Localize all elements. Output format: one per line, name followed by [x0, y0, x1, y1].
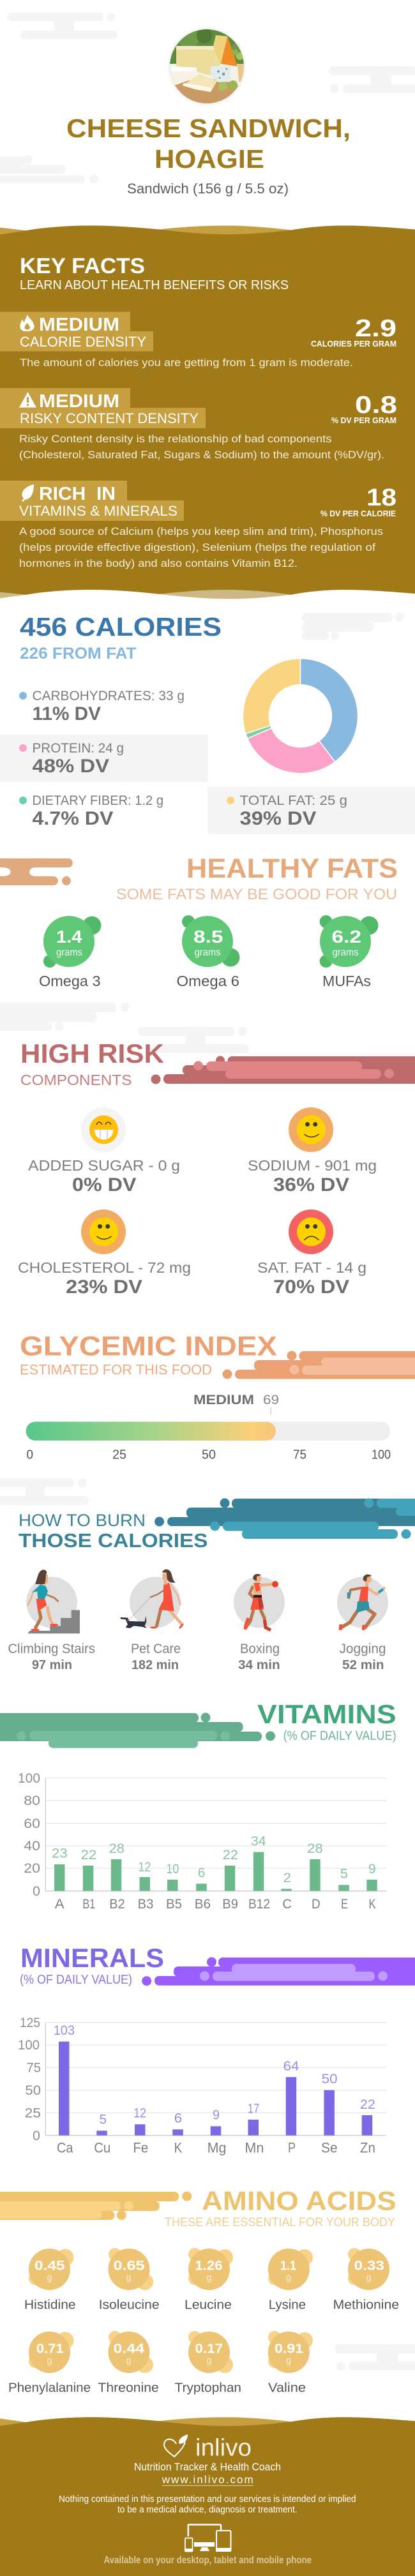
fact: rich in vitamins and minerals: A good source of Calcium (helps you keep slim and trim), Phosphorus: [19, 525, 383, 537]
risk: cholesterol: CHOLESTEROL - 72 mg: [18, 1259, 191, 1276]
figure: runner: [340, 1575, 385, 1630]
bar chart: minerals: Ca: [57, 2140, 73, 2156]
fat: omega 3: 1.4: [56, 927, 82, 947]
amino acid: phenylalanine: 0.71: [36, 2342, 64, 2356]
heading: healthy fats: HEALTHY FATS: [186, 853, 398, 884]
fact: calorie density: CALORIES PER GRAM: [311, 339, 396, 348]
amino acid: leucine: [185, 2248, 233, 2312]
fact: rich in vitamins and minerals: % DV PER CALORIE: [321, 509, 396, 518]
title: HOAGIE: [155, 144, 264, 174]
glycemic index gauge: 75: [293, 1448, 306, 1462]
heading: calories: [20, 612, 222, 663]
amino acid: lysine: g: [286, 2272, 291, 2283]
heading: vitamins: (% OF DAILY VALUE): [283, 1729, 396, 1743]
fat: omega 3: [39, 916, 101, 989]
bar chart: vitamins: B6: [195, 1897, 211, 1912]
disclaimer: Nothing contained in this presentation and our services is intended or implied: [59, 2494, 356, 2505]
bar chart: vitamins: D: [312, 1897, 321, 1912]
bar chart: minerals: 103: [54, 2023, 75, 2038]
bar chart: minerals: Mg: [207, 2140, 226, 2156]
banner: green cloud: [0, 1713, 275, 1748]
disclaimer: to be a medical advice, diagnosis or treatment.: [117, 2505, 298, 2515]
bar chart: vitamins: 100: [18, 1771, 40, 1786]
banner: orange cloud: [222, 1351, 415, 1379]
activity: jogging: Jogging: [340, 1642, 386, 1656]
amino acid: phenylalanine: g: [47, 2355, 52, 2366]
fact: calorie density: MEDIUM: [39, 315, 119, 335]
fact: calorie density: [0, 311, 396, 369]
bar chart: vitamins: A: [55, 1897, 64, 1912]
banner: yellow cloud: [0, 2192, 192, 2220]
glycemic index gauge: 25: [112, 1448, 126, 1462]
fact: risky content density: RISKY CONTENT DENSITY: [20, 410, 199, 426]
fact: risky content density: MEDIUM: [39, 391, 119, 412]
amino acid: tryptophan: Tryptophan: [175, 2381, 241, 2395]
risk: sodium: [248, 1107, 377, 1195]
fact: rich in vitamins and minerals: hormones in the body) and also contains Vitamin B12.: [19, 557, 298, 569]
fact: rich in vitamins and minerals: 18: [366, 484, 396, 511]
icon: grinning face: [89, 1116, 118, 1144]
fat: MUFAs: [320, 915, 378, 989]
bar chart: vitamins: 60: [24, 1816, 40, 1831]
amino acid: isoleucine: g: [126, 2272, 132, 2283]
fact: calorie density: CALORIE DENSITY: [20, 334, 146, 350]
fact: rich in vitamins and minerals: (helps provide effective digestion), Selenium (helps the regulation of: [19, 541, 375, 553]
food photo: cheese board: [168, 27, 246, 105]
heading: key facts: LEARN ABOUT HEALTH BENEFITS OR RISKS: [20, 278, 289, 292]
amino acid: isoleucine: [99, 2248, 160, 2312]
serving size: Sandwich (156 g / 5.5 oz): [127, 181, 289, 197]
macro: total fat: TOTAL FAT: 25 g: [240, 793, 347, 808]
bar chart: vitamins: K: [369, 1897, 376, 1912]
activity: jogging: 52 min: [342, 1658, 384, 1672]
bar chart: vitamins: [18, 1771, 386, 1912]
amino acid: histidine: Histidine: [24, 2298, 76, 2312]
bar chart: vitamins: B9: [222, 1897, 238, 1912]
amino acid: methionine: [333, 2248, 399, 2312]
bar chart: minerals: 22: [360, 2097, 375, 2112]
heading: glycemic index: [20, 1331, 415, 1379]
banner: purple cloud: [142, 1957, 415, 1986]
bar chart: vitamins: 6: [198, 1866, 205, 1880]
bar chart: vitamins: 5: [340, 1867, 348, 1882]
bar chart: vitamins: 28: [109, 1841, 124, 1856]
amino acid: leucine: g: [207, 2272, 212, 2283]
bar chart: vitamins: 2: [283, 1871, 291, 1885]
activity: climbing stairs: Climbing Stairs: [8, 1642, 95, 1656]
bar chart: vitamins: 10: [166, 1862, 179, 1876]
heading: glycemic index: GLYCEMIC INDEX: [20, 1331, 277, 1362]
amino acid: leucine: 1.26: [195, 2259, 222, 2273]
bar chart: vitamins: B3: [138, 1897, 153, 1912]
bar chart: minerals: Zn: [360, 2140, 375, 2156]
glycemic index gauge: 50: [202, 1448, 216, 1462]
glycemic index gauge: 69: [263, 1393, 279, 1407]
heading: amino acids: AMINO ACIDS: [202, 2186, 396, 2216]
heading: how to burn those calories: HOW TO BURN: [19, 1511, 146, 1530]
amino acid: tryptophan: g: [207, 2355, 212, 2366]
fact: calorie density: The amount of calories you are getting from 1 gram is moderate.: [20, 356, 353, 369]
bar chart: vitamins: 22: [80, 1848, 96, 1862]
bar chart: minerals: [18, 2016, 386, 2156]
bar chart: minerals: 9: [213, 2108, 220, 2123]
amino acid: tryptophan: [175, 2331, 241, 2395]
banner: red cloud: [151, 1056, 415, 1084]
activity: climbing stairs: 97 min: [32, 1658, 72, 1672]
heading: healthy fats: [0, 853, 398, 903]
amino acid: valine: 0.91: [275, 2342, 303, 2356]
icon: leaf: [22, 484, 34, 502]
heading: key facts: [20, 254, 289, 292]
figure: woman climbing stairs: [27, 1569, 80, 1633]
bar chart: vitamins: 20: [24, 1861, 40, 1876]
amino acid: threonine: [98, 2331, 159, 2395]
macro: total fat: [227, 793, 347, 829]
risk: cholesterol: [18, 1209, 191, 1298]
amino acid: isoleucine: Isoleucine: [99, 2298, 160, 2312]
fact: rich in vitamins and minerals: VITAMINS & MINERALS: [19, 503, 177, 519]
activity: pet care: [120, 1569, 185, 1672]
amino acid: phenylalanine: [8, 2332, 91, 2395]
amino acid: tryptophan: 0.17: [195, 2342, 223, 2356]
amino acid: histidine: g: [47, 2272, 52, 2283]
macro: carbohydrates: 11% DV: [32, 703, 101, 724]
amino acid: threonine: Threonine: [98, 2381, 159, 2395]
tagline and website: [134, 2461, 281, 2486]
bar chart: minerals: 5: [100, 2113, 107, 2127]
disclaimer: [59, 2494, 356, 2515]
fact: risky content density: Risky Content density is the relationship of bad components: [19, 433, 332, 445]
bar chart: minerals: Fe: [133, 2140, 148, 2156]
glycemic index gauge: MEDIUM: [193, 1393, 254, 1407]
icon: flame: [20, 315, 34, 331]
amino acid: lysine: Lysine: [269, 2298, 306, 2312]
bar chart: vitamins: 28: [307, 1841, 323, 1856]
amino acid: histidine: [24, 2249, 76, 2312]
bar chart: vitamins: C: [282, 1897, 292, 1912]
bar chart: minerals: 50: [25, 2083, 41, 2098]
macro: protein: 48% DV: [32, 756, 109, 777]
bar chart: vitamins: 34: [251, 1834, 266, 1849]
activity: pet care: 182 min: [132, 1658, 179, 1672]
risk: saturated fat: SAT. FAT - 14 g: [257, 1259, 366, 1276]
icon: smiling face: [297, 1116, 326, 1144]
heading: vitamins: [0, 1699, 396, 1748]
bar chart: vitamins: B1: [82, 1897, 95, 1912]
bar chart: vitamins: 22: [223, 1848, 238, 1862]
banner: teal cloud: [155, 1499, 415, 1539]
risk: sodium: SODIUM - 901 mg: [248, 1157, 377, 1174]
donut chart: [243, 659, 358, 774]
heading: minerals: (% OF DAILY VALUE): [20, 1973, 132, 1987]
glycemic index gauge: [26, 1393, 391, 1462]
amino acid: methionine: Methionine: [333, 2298, 399, 2312]
tagline and website: www.inlivo.com: [162, 2474, 253, 2486]
title: [66, 114, 351, 174]
bar chart: vitamins: 40: [24, 1839, 40, 1853]
bar chart: minerals: K: [174, 2140, 182, 2156]
fat: omega 6: 8.5: [193, 927, 223, 947]
risk: sodium: 36% DV: [273, 1174, 349, 1195]
activity: pet care: Pet Care: [131, 1642, 181, 1656]
icon: warning triangle: [19, 392, 36, 407]
fat: omega 6: Omega 6: [176, 973, 239, 989]
bar chart: vitamins: B2: [109, 1897, 125, 1912]
activity: boxing: Boxing: [240, 1642, 280, 1656]
bar chart: minerals: 6: [174, 2111, 182, 2126]
panel: footer: [0, 2417, 415, 2576]
tagline and website: Nutrition Tracker & Health Coach: [134, 2461, 281, 2473]
bar chart: vitamins: B5: [166, 1897, 182, 1912]
bar chart: minerals: P: [288, 2140, 296, 2156]
fact: risky content density: [0, 388, 397, 461]
fact: risky content density: 0.8: [355, 392, 397, 419]
heading: key facts: KEY FACTS: [20, 254, 145, 278]
macro: protein: [19, 741, 124, 777]
heading: vitamins: VITAMINS: [257, 1699, 396, 1729]
glycemic index gauge: 100: [372, 1448, 391, 1462]
bar chart: minerals: Cu: [94, 2140, 110, 2156]
fat: MUFAs: MUFAs: [322, 973, 371, 989]
bar chart: vitamins: 80: [24, 1793, 40, 1808]
logo: inlivo heart and leaf: inlivo: [195, 2435, 252, 2462]
fat: MUFAs: 6.2: [332, 927, 361, 947]
availability note: Available on your desktop, tablet and mobile phone: [103, 2555, 312, 2566]
heading: how to burn those calories: [19, 1499, 415, 1552]
bar chart: vitamins: B12: [248, 1897, 270, 1912]
title: CHEESE SANDWICH,: [66, 114, 351, 143]
heading: healthy fats: SOME FATS MAY BE GOOD FOR YOU: [116, 886, 397, 903]
amino acid: lysine: 1.1: [280, 2259, 296, 2273]
fat: omega 6: grams: [194, 947, 221, 958]
heading: glycemic index: ESTIMATED FOR THIS FOOD: [20, 1362, 212, 1378]
heading: minerals: [20, 1943, 415, 1987]
bar chart: vitamins: E: [341, 1897, 348, 1912]
fact: calorie density: 2.9: [355, 315, 396, 342]
banner: orange cloud: [0, 858, 73, 885]
heading: amino acids: THESE ARE ESSENTIAL FOR YOUR BODY: [165, 2215, 395, 2229]
macro: carbohydrates: [19, 689, 185, 724]
macro: dietary fiber: DIETARY FIBER: 1.2 g: [32, 793, 163, 808]
heading: minerals: MINERALS: [20, 1943, 164, 1973]
bar chart: minerals: 17: [248, 2102, 259, 2116]
fat: MUFAs: grams: [332, 947, 359, 958]
amino acid: leucine: Leucine: [185, 2298, 232, 2312]
fact: rich in vitamins and minerals: [0, 481, 396, 569]
bar chart: minerals: 75: [27, 2060, 41, 2076]
amino acid: phenylalanine: Phenylalanine: [8, 2381, 91, 2395]
risk: added sugar: ADDED SUGAR - 0 g: [28, 1157, 180, 1174]
heading: calories: 226 FROM FAT: [20, 645, 137, 663]
fat: omega 6: [176, 915, 240, 989]
icon: smiling face: [89, 1218, 118, 1246]
bar chart: minerals: 64: [283, 2059, 299, 2074]
icon: sad face: [297, 1218, 326, 1246]
glycemic index gauge: 0: [27, 1448, 33, 1462]
activity: boxing: [234, 1574, 285, 1672]
fact: rich in vitamins and minerals: RICH IN: [39, 484, 116, 504]
heading: calories: 456 CALORIES: [20, 612, 222, 641]
amino acid: isoleucine: 0.65: [114, 2259, 145, 2273]
bar chart: minerals: 12: [133, 2106, 146, 2121]
macro: carbohydrates: CARBOHYDRATES: 33 g: [32, 689, 185, 703]
amino acid: histidine: 0.45: [34, 2259, 65, 2273]
fat: omega 3: grams: [56, 947, 82, 958]
bar chart: minerals: Se: [321, 2140, 338, 2156]
panel: key facts: [0, 226, 415, 599]
amino acid: methionine: 0.33: [354, 2259, 384, 2273]
macro: total fat: 39% DV: [240, 808, 317, 829]
heading: amino acids: [0, 2186, 396, 2229]
amino acid: lysine: [268, 2249, 313, 2312]
heading: how to burn those calories: THOSE CALORIES: [19, 1529, 208, 1552]
amino acid: valine: g: [286, 2355, 291, 2366]
fact: risky content density: % DV PER GRAM: [331, 416, 396, 425]
figure: woman walking dog: [120, 1569, 185, 1629]
bar chart: minerals: Mn: [245, 2140, 264, 2156]
bar chart: minerals: 50: [322, 2072, 338, 2086]
risk: added sugar: [28, 1107, 180, 1195]
activity: jogging: [337, 1575, 388, 1672]
heading: high risk: COMPONENTS: [20, 1072, 132, 1088]
bar chart: vitamins: 12: [138, 1860, 151, 1875]
bar chart: minerals: 0: [33, 2129, 40, 2143]
bar chart: minerals: 25: [25, 2106, 41, 2120]
activity: boxing: 34 min: [238, 1658, 280, 1672]
risk: added sugar: 0% DV: [72, 1174, 137, 1195]
bar chart: minerals: 100: [18, 2038, 40, 2053]
macro: dietary fiber: [19, 793, 163, 829]
macro: dietary fiber: 4.7% DV: [32, 808, 114, 829]
figure: boxer: [245, 1574, 278, 1630]
bar chart: vitamins: 0: [33, 1884, 40, 1899]
amino acid: methionine: g: [366, 2272, 372, 2283]
heading: high risk: HIGH RISK: [20, 1038, 164, 1068]
amino acid: valine: [268, 2331, 313, 2395]
macro: protein: PROTEIN: 24 g: [32, 741, 124, 756]
risk: saturated fat: 70% DV: [273, 1277, 349, 1298]
icon: desktop, tablet and phone: [185, 2525, 231, 2552]
panel: macronutrients: [0, 689, 415, 834]
bar chart: minerals: 125: [20, 2016, 40, 2030]
bar chart: vitamins: 9: [368, 1862, 376, 1876]
amino acid: threonine: 0.44: [114, 2342, 144, 2356]
heading: high risk: [20, 1038, 415, 1088]
logo: inlivo heart and leaf: [164, 2434, 252, 2462]
fat: omega 3: Omega 3: [39, 973, 101, 989]
amino acid: threonine: g: [126, 2355, 132, 2366]
activity: climbing stairs: [8, 1569, 95, 1672]
fact: risky content density: (Cholesterol, Saturated Fat, Sugars & Sodium) to the amount (%DV/gr).: [19, 449, 384, 461]
risk: cholesterol: 23% DV: [66, 1277, 142, 1298]
amino acid: valine: Valine: [268, 2381, 306, 2395]
risk: saturated fat: [257, 1209, 366, 1298]
bar chart: vitamins: 23: [52, 1846, 68, 1861]
